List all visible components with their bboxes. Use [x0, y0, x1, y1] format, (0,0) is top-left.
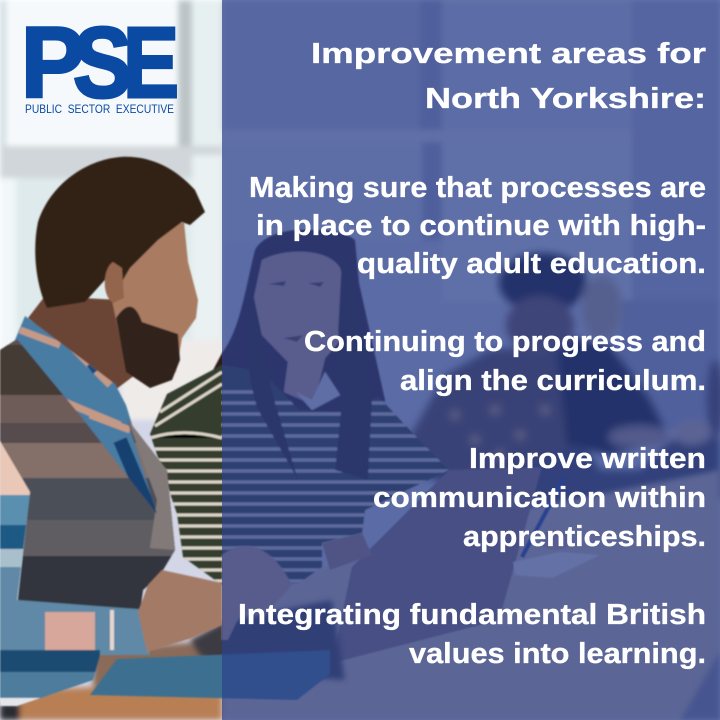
logo: PSE [21, 7, 179, 119]
text block: apprenticeships: Improve written [469, 443, 706, 475]
man [0, 157, 222, 710]
logo strapline: PUBLIC SECTOR EXECUTIVE [25, 102, 174, 116]
text block: adult education: in place to continue with high- [256, 210, 706, 242]
heading: North Yorkshire: [425, 83, 706, 115]
man shirt collar and placket [14, 316, 158, 514]
woman sweater [149, 364, 448, 586]
blue book [90, 650, 330, 700]
text block: curriculum: align the curriculum. [400, 365, 706, 397]
text block: British values: Integrating fundamental British [238, 599, 706, 631]
logo letter E: E [123, 7, 179, 119]
laptop base and dark keyboard [190, 600, 345, 680]
woman forearm [322, 533, 372, 570]
woman hair front [248, 250, 372, 480]
laptop [332, 467, 542, 663]
text block: adult education: Making sure that processes are [249, 172, 706, 204]
text block: apprenticeships: communication within [373, 482, 706, 514]
man knit vest [0, 340, 180, 620]
heading: Improvement areas for [311, 38, 706, 70]
woman face [254, 252, 348, 405]
notebook and pen [513, 478, 600, 578]
text block: apprenticeships [373, 443, 706, 553]
logo letter S: S [73, 7, 132, 119]
woman hair back [212, 230, 385, 483]
woman hand on laptop [222, 546, 292, 640]
blue overlay panel [222, 0, 720, 720]
man hair [35, 157, 205, 308]
text block: British values: values into learning. [409, 638, 706, 670]
man hand [138, 570, 222, 652]
text block: adult education [249, 172, 706, 280]
man face [112, 222, 198, 386]
text block: adult education: quality adult education. [357, 248, 706, 280]
woman [140, 230, 460, 590]
text block: British values [238, 599, 706, 670]
man ear [105, 262, 124, 303]
man neck [28, 296, 135, 390]
woman collar [296, 372, 340, 410]
man sleeve [0, 440, 155, 710]
blurred students in background [405, 253, 720, 510]
man beard [116, 307, 180, 388]
text block: apprenticeships: apprenticeships. [463, 521, 706, 553]
text block: curriculum [304, 326, 706, 397]
heading [311, 38, 706, 115]
table [0, 470, 720, 720]
text block: curriculum: Continuing to progress and [304, 326, 706, 358]
logo letter P: P [21, 7, 85, 119]
